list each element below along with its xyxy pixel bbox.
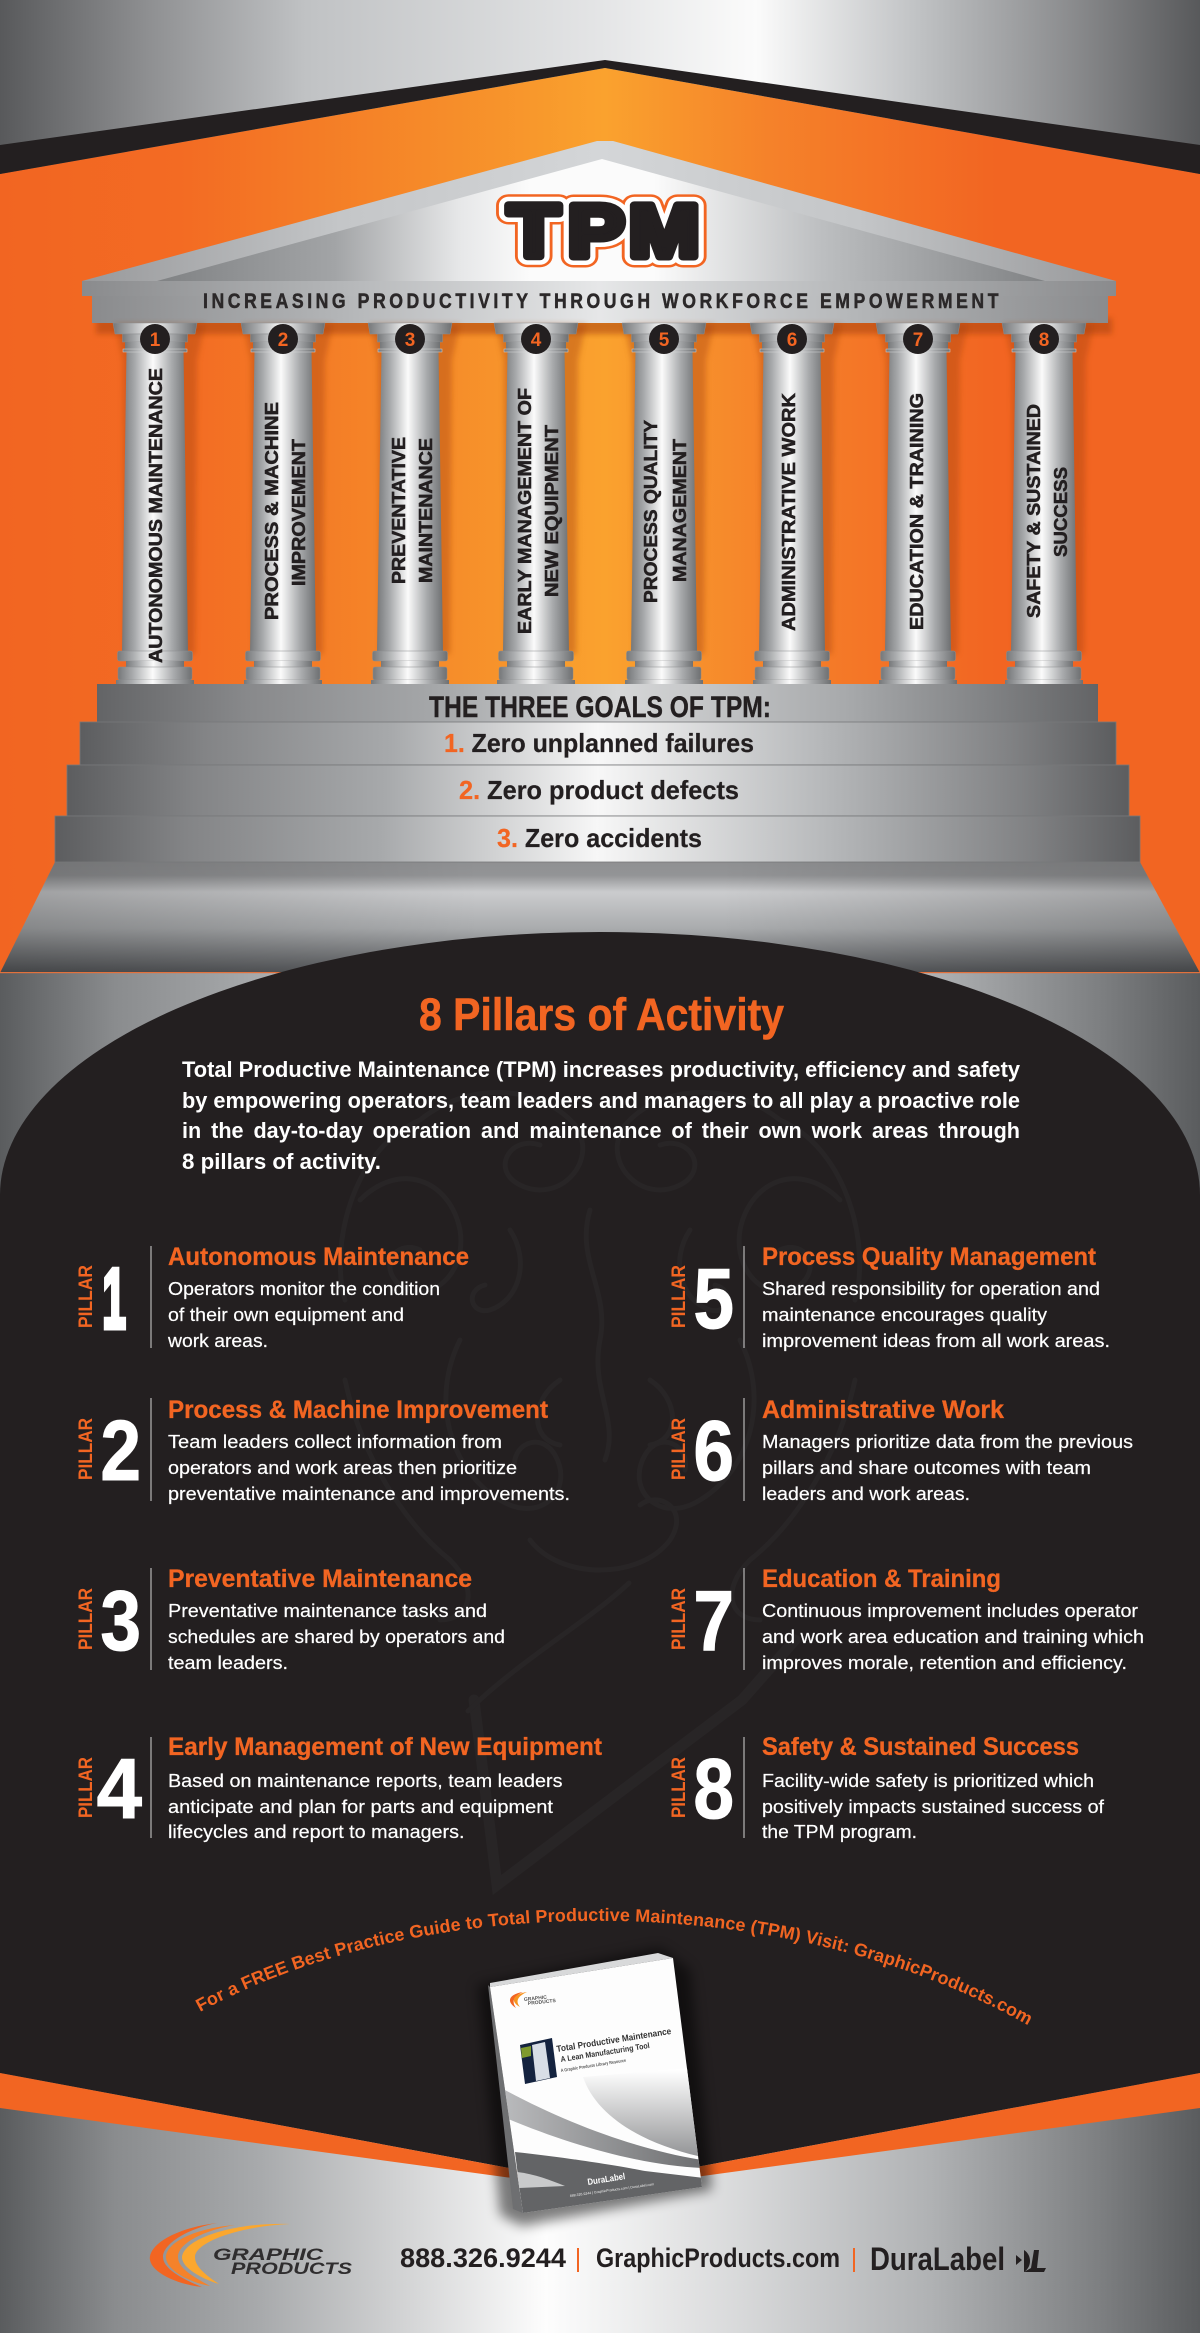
intro paragraph: in the day-to-day operation and maintenance of their own work areas through	[182, 1118, 1020, 1143]
column 4: EARLY MANAGEMENT OF	[514, 388, 535, 634]
pillar 1: Operators monitor the condition	[168, 1278, 440, 1299]
pillar 4: anticipate and plan for parts and equipment	[168, 1796, 553, 1817]
guide book: 888.326.9244 | GraphicProducts.com | DuraLabel.com	[570, 2182, 654, 2198]
background: lower silver	[0, 973, 1200, 2333]
column 1: 1	[150, 330, 161, 351]
pillar 2: Team leaders collect information from	[168, 1431, 502, 1452]
column 5: 5	[659, 330, 670, 351]
intro paragraph: 8 pillars of activity.	[182, 1149, 381, 1174]
icon: DuraLabel mark	[1016, 2250, 1046, 2272]
tagline on entablature: INCREASING PRODUCTIVITY THROUGH WORKFORCE EMPOWERMENT	[203, 290, 999, 313]
column 4	[494, 323, 586, 684]
pillar 1: work areas.	[167, 1330, 268, 1351]
intro paragraph: Total Productive Maintenance (TPM) increases productivity, efficiency and safety	[182, 1057, 1021, 1082]
footer contact line: GraphicProducts.com	[596, 2243, 840, 2273]
pillar 2	[76, 1396, 570, 1504]
guide book: PRODUCTS	[528, 1998, 557, 2007]
temple base trapezoid	[0, 862, 1200, 973]
pillar 5: maintenance encourages quality	[762, 1304, 1048, 1325]
pillar 8: positively impacts sustained success of	[762, 1796, 1105, 1817]
pillar 6: Administrative Work	[762, 1396, 1004, 1424]
pillar 6	[669, 1396, 1133, 1504]
guide book: GRAPHIC	[524, 1995, 548, 2003]
pillar 7: improves morale, retention and efficiency.	[762, 1652, 1127, 1673]
pillar 4: PILLAR	[76, 1757, 97, 1818]
background: silver top	[0, 0, 1200, 180]
Graphic Products logo: GRAPHIC	[213, 2245, 324, 2264]
pillar 6: 6	[693, 1403, 734, 1498]
pillar 6: pillars and share outcomes with team	[762, 1457, 1091, 1478]
pediment roof	[82, 141, 1116, 281]
column 6	[750, 323, 842, 684]
pillar 3: 3	[100, 1573, 141, 1668]
pillar 1	[76, 1243, 469, 1351]
pillar 3: Preventative Maintenance	[168, 1565, 472, 1593]
pillar 6: PILLAR	[669, 1418, 690, 1480]
column 1	[113, 323, 205, 684]
footer contact line: 888.326.9244	[400, 2243, 566, 2273]
column 3: PREVENTATIVE	[388, 437, 409, 584]
pillar 8: PILLAR	[669, 1757, 690, 1818]
footer contact line	[400, 2241, 1005, 2277]
black chevron	[0, 60, 1200, 174]
TPM logotype: TPM	[508, 190, 700, 272]
pillar 7: Continuous improvement includes operator	[762, 1600, 1138, 1621]
pillar 4: lifecycles and report to managers.	[168, 1821, 464, 1842]
Graphic Products logo	[150, 2223, 353, 2287]
pillar 8	[669, 1733, 1105, 1842]
column 7: EDUCATION & TRAINING	[906, 393, 927, 630]
pillar 2: operators and work areas then prioritize	[168, 1457, 517, 1478]
column 5	[622, 323, 714, 684]
pillar 8: Facility-wide safety is prioritized which	[762, 1770, 1094, 1791]
column 8: SAFETY & SUSTAINED	[1023, 404, 1044, 618]
orange V band	[0, 2073, 1200, 2190]
column 2: PROCESS & MACHINE	[261, 402, 282, 620]
step 4: goal 3: 3. Zero accidents	[497, 823, 702, 853]
footer contact line: DuraLabel	[870, 2241, 1005, 2277]
pillar 4: 4	[97, 1741, 142, 1836]
guide book: A Graphic Products Library Resource	[560, 2058, 627, 2073]
black content panel with dome	[0, 932, 1200, 2185]
curved call to action: For a FREE Best Practice Guide to Total Productive Maintenance (TPM) Visit: GraphicProducts.com	[195, 1908, 1031, 2025]
pillar 5: Process Quality Management	[762, 1243, 1097, 1271]
entablature	[82, 281, 1116, 334]
pillar 3: Preventative maintenance tasks and	[168, 1600, 487, 1621]
pillar 5: 5	[693, 1251, 734, 1346]
column 4: NEW EQUIPMENT	[541, 424, 562, 597]
pillar 2: 2	[100, 1403, 141, 1498]
step 1: goals heading: THE THREE GOALS OF TPM:	[429, 691, 771, 724]
column 2	[241, 323, 333, 684]
column 6: ADMINISTRATIVE WORK	[778, 392, 799, 631]
pillar 3	[76, 1565, 505, 1673]
heading: 8 Pillars of Activity: 8 Pillars of Activity	[419, 989, 784, 1040]
column 8: 8	[1039, 330, 1049, 351]
guide book: DuraLabel	[587, 2171, 626, 2187]
step 1: goals heading	[97, 684, 1098, 724]
column 7	[876, 323, 968, 684]
pillar 7: and work area education and training which	[762, 1626, 1144, 1647]
column 3: MAINTENANCE	[415, 438, 436, 583]
pillar 7: PILLAR	[669, 1588, 690, 1650]
intro paragraph	[182, 1057, 1021, 1174]
step 3: goal 2	[67, 765, 1129, 816]
column 5: PROCESS QUALITY	[640, 419, 661, 603]
guide book: Total Productive Maintenance	[556, 2026, 672, 2054]
pillar 5: Shared responsibility for operation and	[762, 1278, 1100, 1299]
guide book: A Lean Manufacturing Tool	[560, 2041, 650, 2064]
guide book	[478, 1948, 712, 2226]
column 7: 7	[913, 330, 923, 351]
step 2: goal 1: 1. Zero unplanned failures	[444, 728, 754, 758]
pillar 6: Managers prioritize data from the previous	[762, 1431, 1133, 1452]
pillar 2: Process & Machine Improvement	[168, 1396, 549, 1424]
pillar 4: Based on maintenance reports, team leaders	[168, 1770, 562, 1791]
column 3	[368, 323, 460, 684]
pillar 4: Early Management of New Equipment	[168, 1733, 603, 1761]
step 2: goal 1	[80, 722, 1116, 765]
column 6: 6	[787, 330, 797, 351]
pillar 3: schedules are shared by operators and	[168, 1626, 505, 1647]
pillar 5	[669, 1243, 1110, 1351]
Graphic Products logo: PRODUCTS	[231, 2259, 353, 2278]
column 1: AUTONOMOUS MAINTENANCE	[145, 368, 166, 663]
pillar 7: 7	[693, 1573, 734, 1668]
pillar 1: Autonomous Maintenance	[168, 1243, 469, 1271]
pillar 5: PILLAR	[669, 1265, 690, 1328]
pillar 3: PILLAR	[76, 1588, 97, 1650]
pillar 7: Education & Training	[762, 1565, 1001, 1593]
background: orange field	[0, 68, 1200, 973]
intro paragraph: by empowering operators, team leaders and managers to all play a proactive role	[182, 1088, 1020, 1113]
TPM logotype: TPM	[508, 190, 700, 272]
pillar 3: team leaders.	[168, 1652, 288, 1673]
watermark: faint ornamental lion head	[340, 1092, 860, 1885]
column 3: 3	[405, 330, 415, 351]
pillar 1: 1	[102, 1252, 126, 1347]
pillar 8: 8	[693, 1741, 734, 1836]
column 4: 4	[531, 330, 542, 351]
pillar 6: leaders and work areas.	[762, 1483, 970, 1504]
TPM logotype: TPM	[508, 190, 700, 272]
pillar 8: Safety & Sustained Success	[762, 1733, 1079, 1761]
column 2: 2	[278, 330, 288, 351]
pillar 4	[76, 1733, 603, 1842]
step 4: goal 3	[55, 816, 1140, 862]
step 3: goal 2: 2. Zero product defects	[459, 775, 739, 805]
pillar 7	[669, 1565, 1144, 1673]
column 2: IMPROVEMENT	[288, 438, 309, 586]
column 5: MANAGEMENT	[669, 438, 690, 582]
pillar 8: the TPM program.	[762, 1821, 917, 1842]
pillar 2: preventative maintenance and improvements.	[168, 1483, 570, 1504]
pillar 1: PILLAR	[76, 1265, 97, 1328]
column 8: SUCCESS	[1050, 467, 1071, 557]
pillar 5: improvement ideas from all work areas.	[762, 1330, 1110, 1351]
pillar 2: PILLAR	[76, 1418, 97, 1480]
pillar 1: of their own equipment and	[168, 1304, 404, 1325]
column 8	[1002, 323, 1094, 684]
